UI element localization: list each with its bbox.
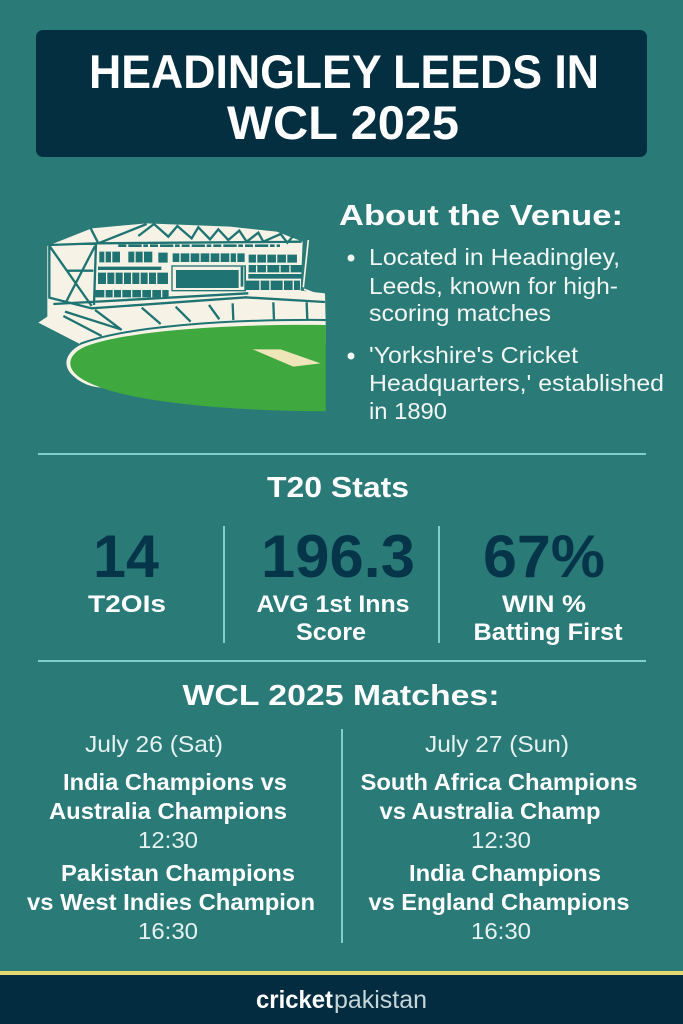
match: India vs England: India Champions — [409, 860, 601, 886]
bullet one: scoring matches — [369, 300, 551, 326]
stat: T20Is: 14 — [93, 523, 160, 590]
match: India vs Australia: Australia Champions — [49, 798, 287, 824]
column: July 27 matches — [360, 731, 638, 944]
cricket field — [70, 325, 326, 411]
pitch — [253, 349, 321, 367]
icon: stadium illustration — [38, 223, 326, 411]
stand roof and facade — [38, 223, 326, 344]
right roof support — [303, 240, 325, 297]
match: Pakistan vs West Indies — [27, 860, 315, 915]
time 12:30: 12:30 — [138, 827, 198, 853]
about the venue — [339, 200, 664, 424]
match: Pakistan vs West Indies: Pakistan Champions — [61, 860, 295, 886]
title banner: HEADINGLEY LEEDS IN — [89, 45, 599, 98]
title banner — [36, 30, 647, 157]
date: July 27: July 27 (Sun) — [425, 731, 569, 757]
stat: average first innings score: Score — [296, 619, 366, 646]
footer logo: cricket — [256, 986, 334, 1014]
match: South Africa vs Australia — [360, 769, 638, 824]
stat: win percentage batting first: 67% — [483, 523, 605, 590]
stat: average first innings score: AVG 1st Inns — [256, 591, 410, 618]
bullet two: Headquarters,' established — [369, 370, 664, 396]
match: Pakistan vs West Indies: vs West Indies Champion — [27, 889, 315, 915]
scoreboard — [171, 265, 246, 291]
time 16:30: 16:30 — [471, 918, 531, 944]
roof truss lines — [48, 224, 325, 336]
match: South Africa vs Australia: vs Australia Champ — [380, 798, 600, 824]
match: India vs England — [368, 860, 630, 915]
title banner: WCL 2025 — [227, 96, 459, 149]
footer logo — [256, 986, 427, 1014]
teal line above boundary — [80, 320, 326, 344]
match: India vs Australia — [49, 769, 287, 824]
time 16:30: 16:30 — [138, 918, 198, 944]
stat: win percentage batting first: WIN % — [502, 591, 586, 618]
stand windows — [95, 252, 302, 297]
bullet two: in 1890 — [369, 398, 447, 424]
bullet one — [348, 244, 620, 326]
matches heading: WCL 2025 Matches: — [182, 680, 500, 712]
stat: win percentage batting first: Batting First — [474, 619, 623, 646]
match: India vs England: vs England Champions — [368, 889, 630, 915]
time 12:30: 12:30 — [471, 827, 531, 853]
bullet one: Leeds, known for high- — [369, 273, 618, 299]
stat: T20Is: T2OIs — [88, 591, 166, 618]
column: July 26 matches — [27, 731, 315, 944]
footer bar — [0, 971, 683, 1024]
stat: win percentage batting first — [474, 523, 623, 646]
bullet one: Located in Headingley, — [369, 244, 620, 270]
about heading: About the Venue: — [339, 200, 623, 232]
stat: average first innings score: 196.3 — [261, 523, 415, 590]
boundary edge — [66, 322, 326, 388]
stat: average first innings score — [256, 523, 415, 646]
T20 stats heading: T20 Stats — [267, 472, 409, 504]
footer logo: pakistan — [334, 986, 427, 1014]
date: July 26: July 26 (Sat) — [85, 731, 223, 757]
bullet two: 'Yorkshire's Cricket — [369, 342, 579, 368]
match: South Africa vs Australia: South Africa Champions — [360, 769, 638, 795]
match: India vs Australia: India Champions vs — [63, 769, 287, 795]
bullet two — [348, 342, 664, 424]
sign text strip — [118, 242, 280, 250]
stat: T20Is — [88, 523, 166, 618]
